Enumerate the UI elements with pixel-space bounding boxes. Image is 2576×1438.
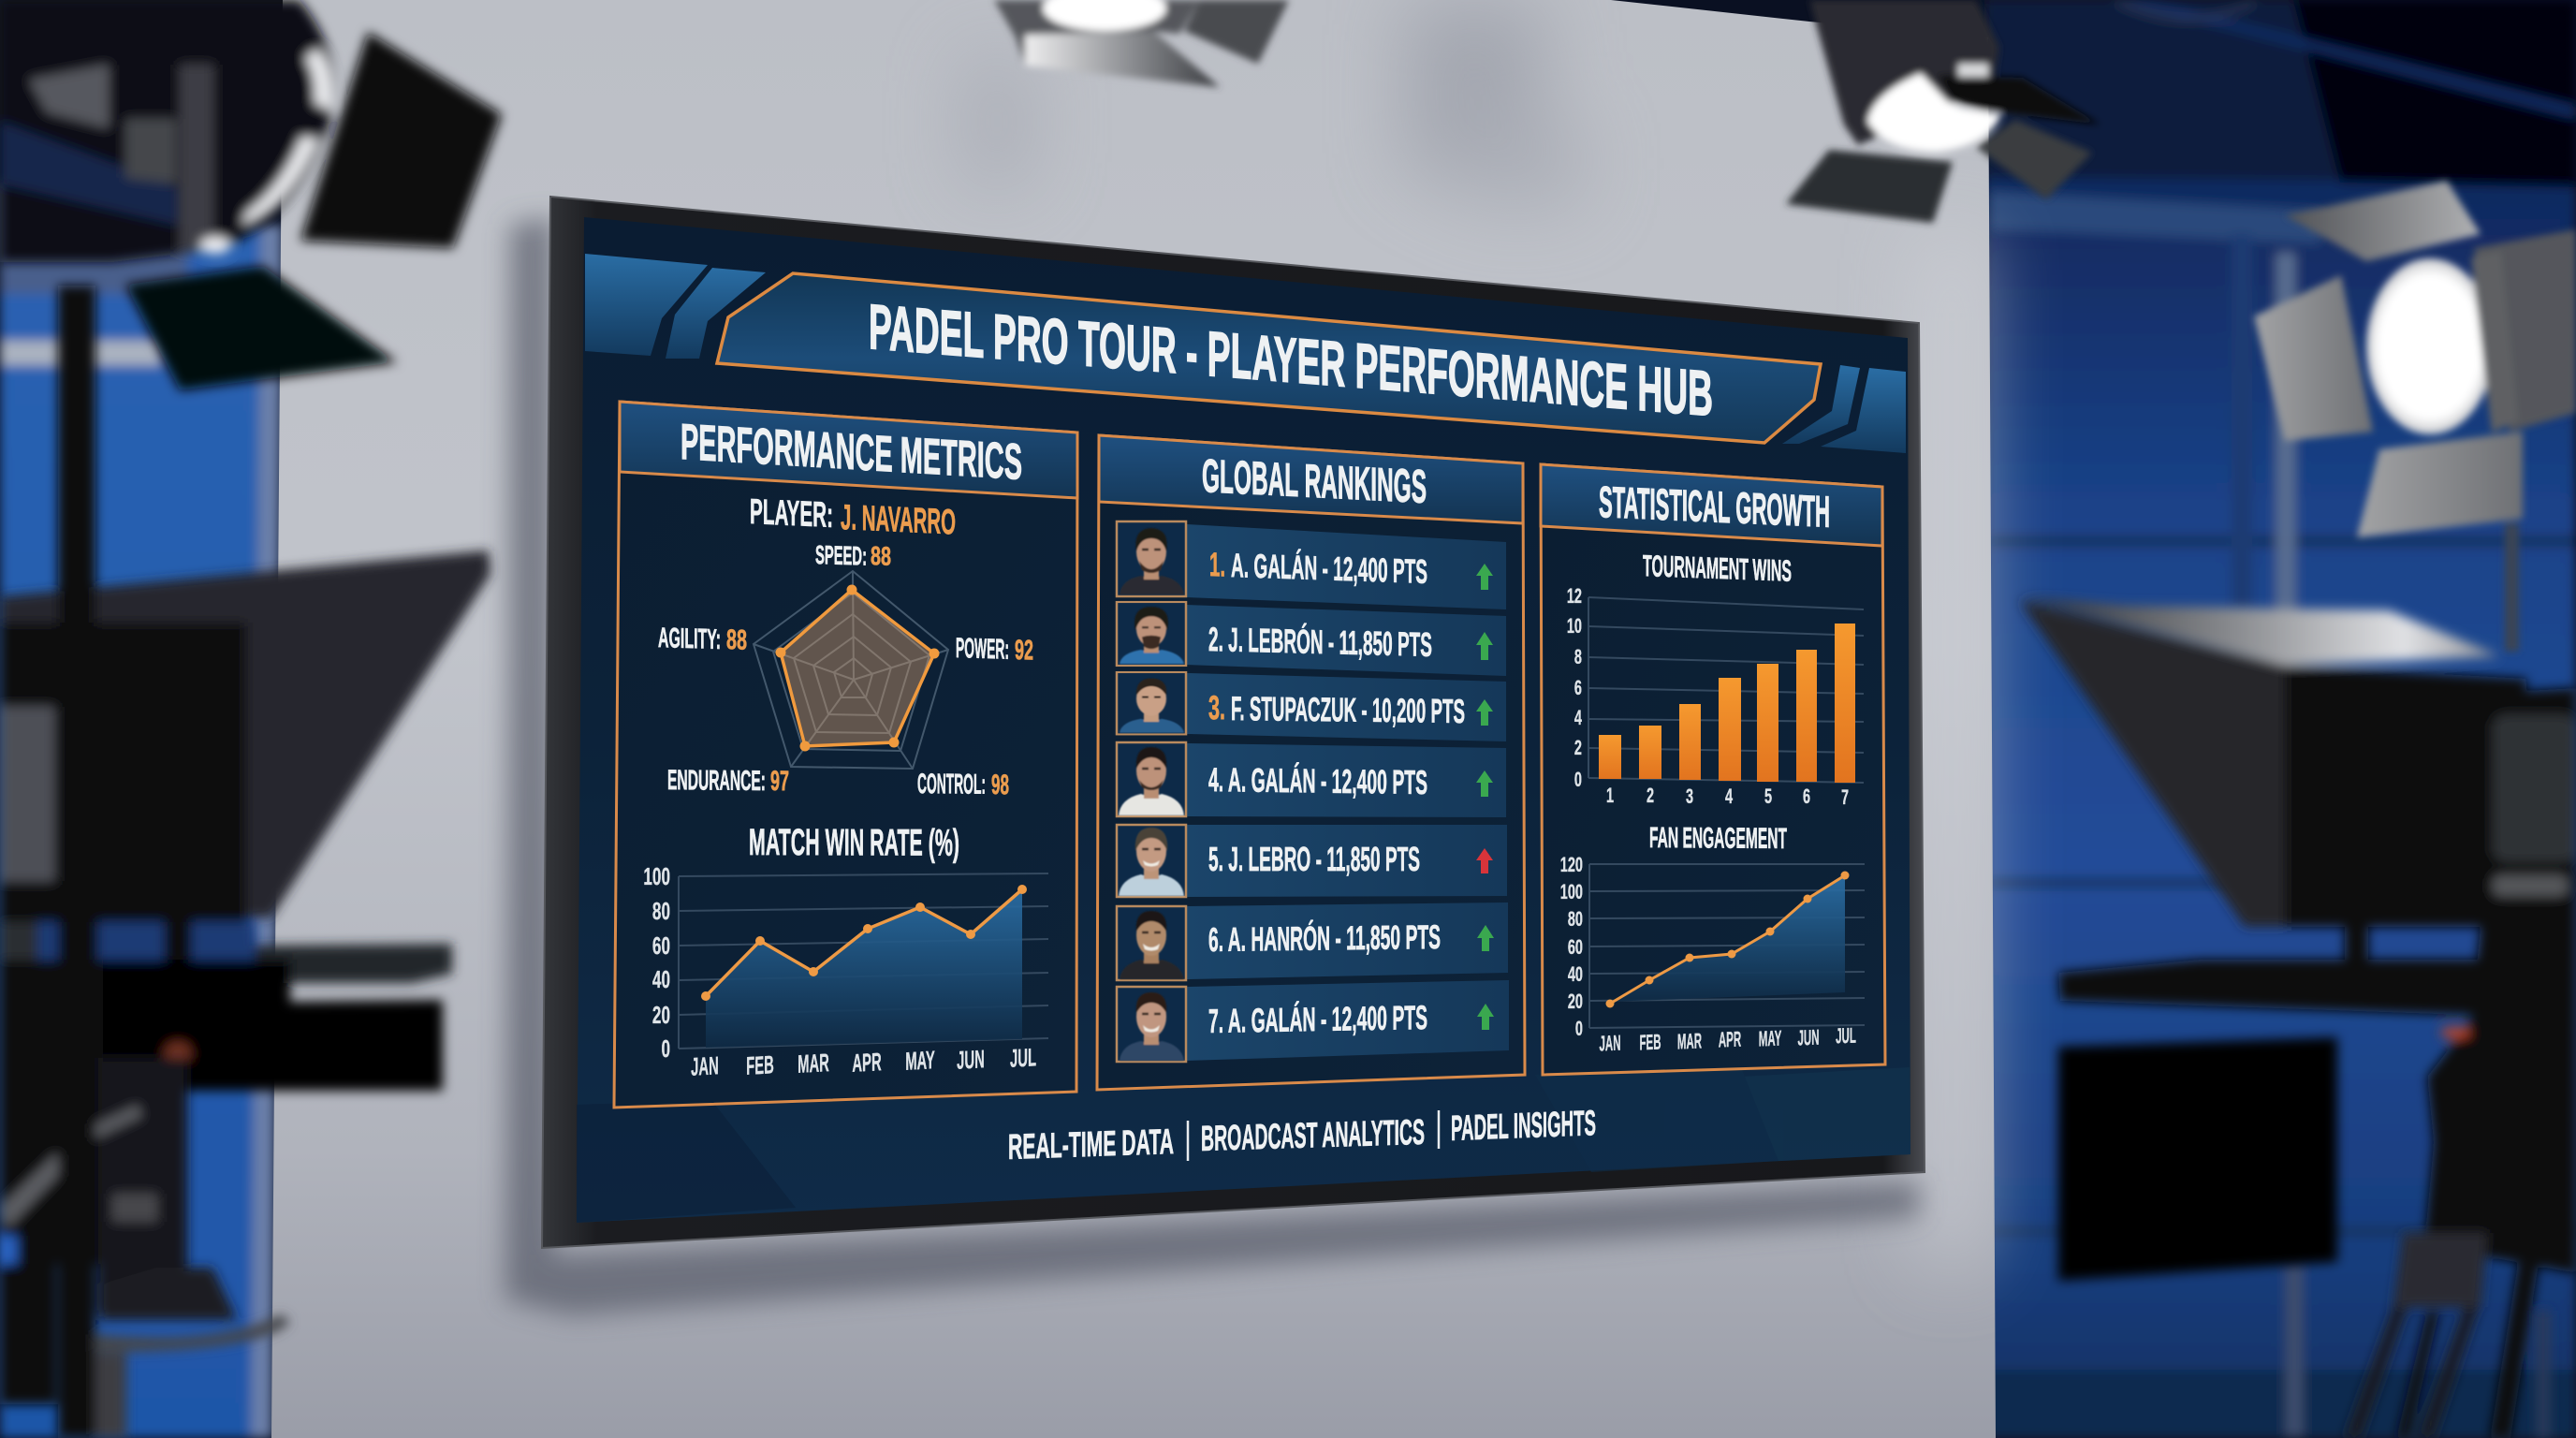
bar chart: tournament wins: 6 — [1803, 785, 1810, 808]
line chart: match win rate: MAR — [798, 1048, 829, 1078]
radar label: endurance — [667, 765, 789, 797]
bar chart: tournament wins: 0 — [1574, 768, 1582, 791]
radar chart — [754, 571, 948, 769]
fan engagement heading: FAN ENGAGEMENT — [1649, 821, 1787, 855]
white wall — [271, 0, 1996, 1438]
panel: statistical growth: STATISTICAL GROWTH — [1599, 477, 1830, 536]
radar label: control: 98 — [991, 770, 1009, 800]
row 3 — [1117, 672, 1506, 741]
line chart: fan engagement: JUL — [1836, 1023, 1856, 1048]
radar label: endurance: 97 — [770, 766, 789, 797]
light: top right — [1786, 0, 2100, 223]
arrow up — [1476, 564, 1493, 590]
line chart: match win rate: 100 — [643, 862, 670, 890]
radar label: power: 92 — [1015, 635, 1033, 667]
avatar 4 — [1117, 742, 1186, 816]
line chart: fan engagement: MAY — [1759, 1026, 1781, 1051]
right blue wall — [1984, 0, 2576, 1438]
title banner — [717, 273, 1821, 443]
teleprompter and camera: right — [2020, 596, 2576, 1438]
line chart: fan engagement: MAR — [1677, 1029, 1702, 1054]
radar label: endurance: ENDURANCE: — [667, 765, 766, 797]
panel: global rankings: GLOBAL RANKINGS — [1202, 449, 1427, 513]
panel frame — [614, 402, 1077, 1108]
bar chart: tournament wins: 4 — [1574, 706, 1582, 729]
line chart: match win rate: FEB — [746, 1049, 774, 1080]
player name — [750, 492, 956, 543]
bar chart: tournament wins: 7 — [1841, 785, 1849, 809]
left chevrons — [585, 254, 766, 359]
line chart: fan engagement: JUN — [1798, 1025, 1819, 1050]
panel: performance metrics — [614, 402, 1077, 1108]
panel: statistical growth — [1541, 464, 1885, 1075]
panel: global rankings — [1097, 435, 1525, 1090]
bar chart: tournament wins: 3 — [1686, 785, 1693, 808]
bar chart: tournament wins: 6 — [1574, 676, 1582, 699]
line chart: fan engagement: 40 — [1568, 962, 1583, 986]
bar chart: tournament wins: 4 — [1725, 785, 1734, 808]
line chart: match win rate: JUL — [1010, 1042, 1036, 1073]
row 5 — [1117, 825, 1507, 897]
monitor shadow — [505, 217, 1919, 1315]
radar label: speed: SPEED: — [815, 540, 867, 571]
line chart: fan engagement: 100 — [1560, 880, 1583, 903]
line chart: fan engagement: JAN — [1600, 1031, 1620, 1056]
radar label: agility: 88 — [726, 624, 747, 656]
header bar — [1099, 435, 1523, 523]
light: top centre — [994, 0, 1289, 87]
line chart: match win rate: 80 — [652, 897, 670, 925]
line chart: match win rate: 60 — [652, 932, 670, 960]
arrow up — [1477, 1004, 1494, 1030]
line chart: match win rate — [643, 862, 1048, 1081]
arrow up — [1476, 699, 1493, 726]
background facets — [577, 1067, 1910, 1223]
avatar 1 — [1117, 521, 1186, 596]
radar label: agility: AGILITY: — [658, 623, 721, 655]
line chart: fan engagement: 120 — [1560, 853, 1583, 876]
row 1: A. GALÁN - 12,400 PTS — [1231, 546, 1427, 591]
bar chart: tournament wins: 1 — [1606, 784, 1614, 807]
line chart: match win rate: JAN — [691, 1050, 719, 1081]
bar chart: tournament wins — [1567, 584, 1864, 809]
avatar 3 — [1117, 672, 1186, 734]
monitor: PADEL INSIGHTS — [1451, 1104, 1596, 1149]
footer tagline — [1008, 1104, 1596, 1167]
monitor bezel — [542, 197, 1925, 1248]
avatar 5 — [1117, 825, 1186, 897]
radar label: speed: 88 — [871, 541, 891, 571]
line chart: match win rate: MAY — [905, 1045, 935, 1076]
screen — [577, 217, 1910, 1223]
heading: PERFORMANCE METRICS — [681, 414, 1022, 491]
header bar — [620, 402, 1077, 498]
avatar 6 — [1117, 906, 1186, 980]
foreground light: top left — [0, 0, 502, 390]
line chart: fan engagement: 0 — [1575, 1017, 1583, 1040]
line chart: match win rate: APR — [852, 1047, 882, 1078]
bar chart: tournament wins: 10 — [1567, 614, 1582, 638]
bar chart: tournament wins: 12 — [1567, 584, 1582, 608]
radar label: control: CONTROL: — [917, 769, 986, 800]
row 2: 2. J. LEBRÓN - 11,850 PTS — [1208, 619, 1432, 664]
row 7 — [1117, 980, 1509, 1062]
player name: PLAYER: — [750, 492, 833, 536]
bar chart: tournament wins: 2 — [1574, 736, 1582, 759]
row 3: 3. — [1208, 688, 1225, 726]
row 6: 6. A. HANRÓN - 11,850 PTS — [1208, 917, 1441, 959]
row 2 — [1117, 602, 1506, 676]
avatar 2 — [1117, 602, 1186, 666]
bar chart: tournament wins: 5 — [1764, 785, 1772, 808]
footer tagline: BROADCAST ANALYTICS — [1201, 1113, 1425, 1159]
line chart: match win rate: 40 — [652, 965, 670, 993]
title: PADEL PRO TOUR - PLAYER PERFORMANCE HUB — [869, 291, 1713, 430]
line chart: fan engagement: 20 — [1568, 990, 1583, 1013]
row 1 — [1117, 521, 1506, 609]
row 4: 4. A. GALÁN - 12,400 PTS — [1208, 760, 1427, 801]
line chart: match win rate: 20 — [652, 1001, 670, 1029]
row 1: 1. — [1209, 545, 1225, 584]
arrow red — [1476, 848, 1493, 873]
line chart: fan engagement — [1560, 853, 1865, 1056]
radar label: control — [917, 769, 1009, 800]
row 3: F. STUPACZUK - 10,200 PTS — [1231, 689, 1465, 730]
row 5: 5. J. LEBRO - 11,850 PTS — [1208, 840, 1420, 878]
arrow up — [1476, 632, 1493, 660]
arrow up — [1476, 770, 1493, 797]
footer tagline: REAL-TIME DATA — [1008, 1123, 1174, 1167]
left blue wall — [0, 183, 283, 1438]
wall soft shading — [964, 0, 1984, 1264]
panel frame — [1097, 435, 1525, 1090]
line chart: fan engagement: 80 — [1568, 907, 1583, 931]
right chevrons — [1782, 365, 1906, 453]
line chart: match win rate: 0 — [661, 1034, 670, 1063]
panel: statistical growth: TOURNAMENT WINS — [1643, 549, 1792, 588]
bar chart: tournament wins: 2 — [1647, 784, 1654, 807]
player name: J. NAVARRO — [841, 498, 956, 543]
match win rate heading: MATCH WIN RATE (%) — [749, 822, 959, 864]
row 6 — [1117, 902, 1508, 980]
row 7: 7. A. GALÁN - 12,400 PTS — [1208, 998, 1427, 1040]
foreground teleprompter: left — [0, 286, 490, 1438]
line chart: fan engagement: 60 — [1568, 935, 1583, 959]
light: right — [2254, 181, 2576, 652]
radar label: power: POWER: — [956, 633, 1009, 666]
bar chart: tournament wins: 8 — [1574, 645, 1582, 668]
panel frame — [1541, 464, 1885, 1075]
radar label: power — [956, 633, 1033, 667]
monitor — [542, 197, 1925, 1248]
line chart: fan engagement: FEB — [1640, 1030, 1661, 1055]
header bar — [1541, 464, 1882, 546]
line chart: match win rate: JUN — [957, 1044, 985, 1075]
line chart: fan engagement: APR — [1719, 1027, 1741, 1052]
arrow up — [1477, 925, 1494, 951]
avatar 7 — [1117, 987, 1186, 1062]
row 4 — [1117, 742, 1506, 817]
